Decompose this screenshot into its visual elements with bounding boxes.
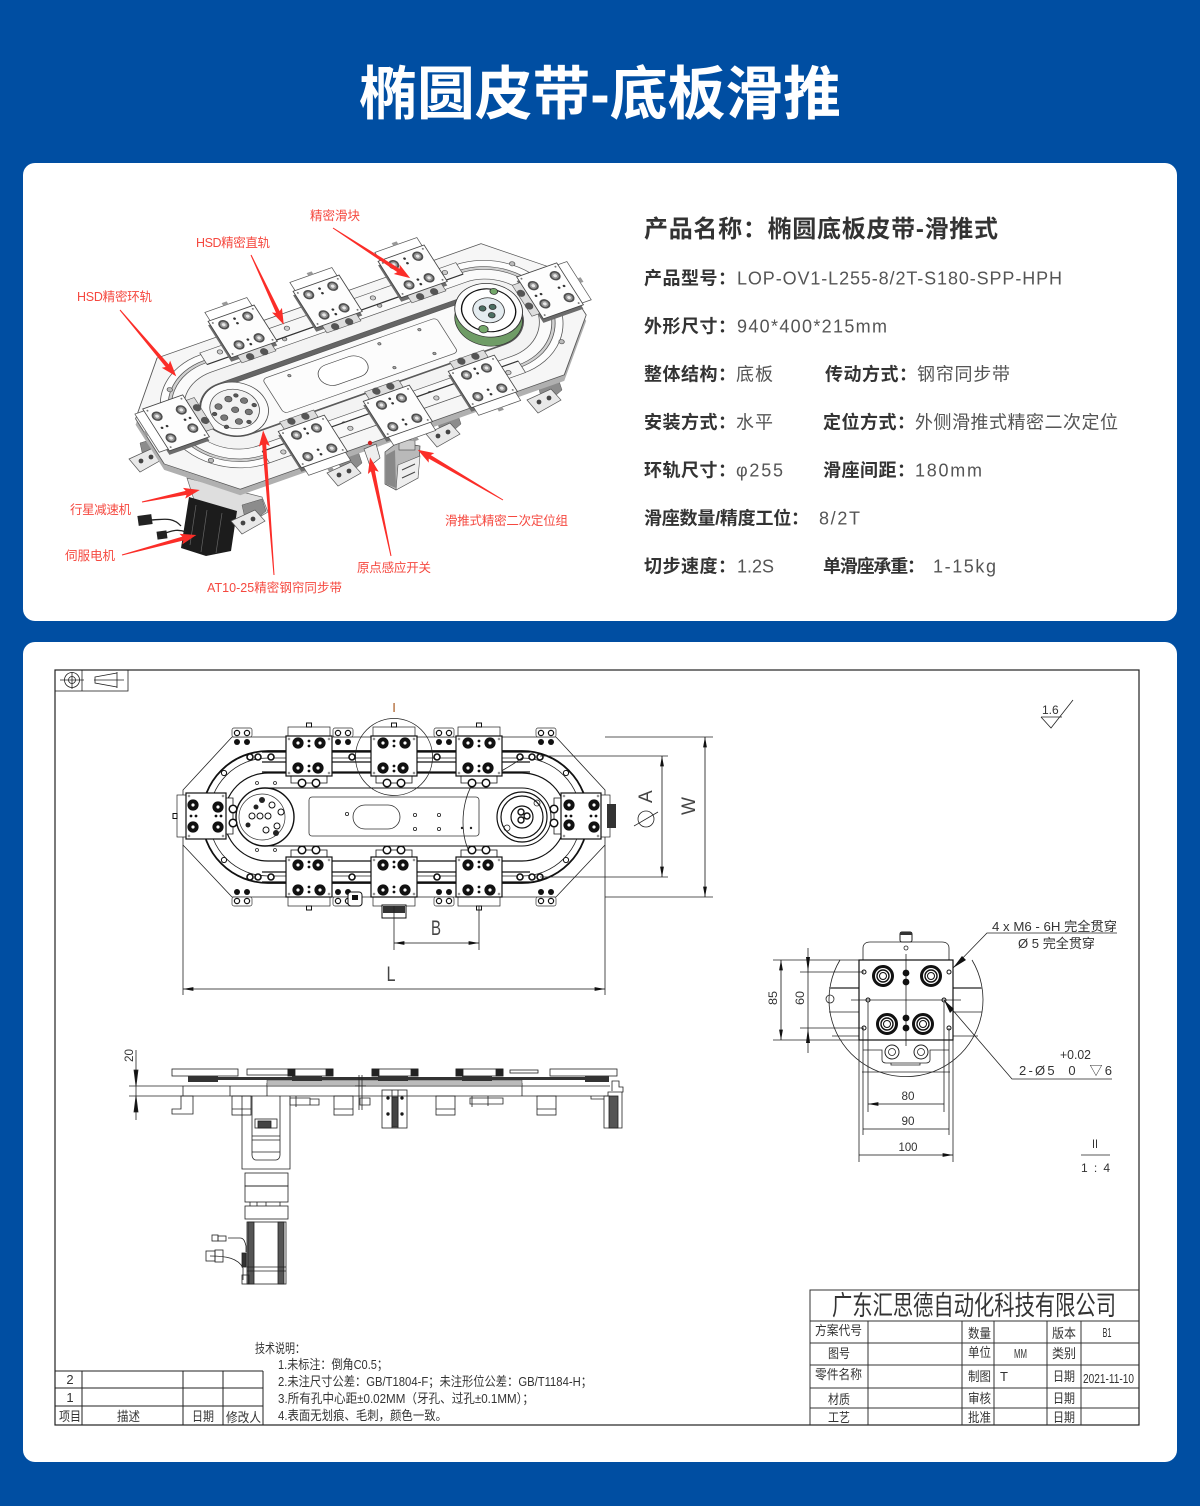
side view drawing: [122, 1049, 623, 1284]
spec: dimensions: 外形尺寸：: [644, 316, 736, 336]
side sensors: [290, 1075, 503, 1110]
detail view II: [766, 919, 1117, 1175]
technical notes: 4.表面无划痕、毛刺，颜色一致。: [278, 1408, 447, 1423]
dimension 80, 90, 100: 100: [898, 1140, 918, 1154]
technical notes: 技术说明：: [255, 1341, 305, 1356]
side gearbox and motor: [242, 1096, 290, 1284]
company title block: T: [1000, 1369, 1008, 1384]
dimension ΦA: A: [636, 790, 657, 803]
spec: mounting and positioning: 安装方式：: [644, 412, 736, 432]
callout: threaded holes: 4 x M6 - 6H 完全贯穿: [992, 919, 1117, 934]
revision table: 日期: [192, 1409, 214, 1424]
spec: structure and drive: 钢帘同步带: [917, 364, 1010, 384]
feet: [232, 728, 556, 906]
plan view drawing: [173, 723, 616, 918]
left wheel: [189, 374, 280, 444]
company title block: 广东汇思德自动化科技有限公司: [832, 1291, 1116, 1321]
spec: slider count: 滑座数量/精度工位：: [644, 508, 809, 528]
company title block: 版本: [1052, 1326, 1076, 1341]
spec: mounting and positioning: 定位方式：: [823, 412, 915, 432]
company title block: 单位: [968, 1345, 991, 1360]
callout: threaded holes: Ø 5 完全贯穿: [1018, 936, 1095, 951]
dimension B: B: [431, 917, 441, 940]
title: 椭圆皮带-底板滑推: [359, 62, 841, 127]
technical notes: 3.所有孔中心距±0.02MM（牙孔、过孔±0.1MM）；: [278, 1391, 534, 1407]
panel: product overview: [23, 163, 1177, 621]
base plate: [108, 232, 613, 513]
callout: pin holes: [944, 1000, 1112, 1079]
dimension 80, 90, 100: 80: [902, 1089, 915, 1103]
3D product illustration: [90, 195, 635, 556]
rail ring and centre plate: [134, 242, 589, 486]
straight guides: [200, 263, 525, 463]
spec: structure and drive: 传动方式：: [825, 364, 917, 384]
company title block: 日期: [1053, 1391, 1075, 1406]
label: origin switch: 原点感应开关: [357, 560, 431, 575]
secondary positioning group: [385, 440, 420, 490]
spec: speed and load: [644, 556, 996, 576]
spec heading: 产品名称：椭圆底板皮带-滑推式: [644, 216, 998, 243]
product spec list: [644, 216, 1118, 576]
spec: dimensions: [644, 316, 887, 336]
projection symbol: [55, 670, 128, 691]
positioning block and sensors: [348, 804, 616, 918]
company title block: [810, 1290, 1139, 1425]
dimension L: L: [386, 963, 396, 986]
spec: structure and drive: 底板: [736, 364, 773, 384]
label: secondary positioning: 滑推式精密二次定位组: [445, 513, 568, 528]
company title block: 制图: [968, 1369, 991, 1384]
arrow: straight rail: [246, 253, 289, 327]
revision table: 1: [66, 1390, 74, 1405]
spec: ring size and pitch: φ255: [736, 460, 783, 480]
spec: model: LOP-OV1-L255-8/2T-S180-SPP-HPH: [737, 268, 1062, 288]
company title block: 工艺: [828, 1410, 850, 1425]
label: HSD ring rail: HSD精密环轨: [77, 289, 152, 304]
revision table: 修改人: [226, 1410, 261, 1425]
dimension 85 and 60: 85: [766, 991, 780, 1005]
dimension W: W: [679, 797, 700, 815]
company title block: 审核: [968, 1391, 991, 1406]
spec: speed and load: 1-15kg: [933, 556, 996, 576]
mounting feet: [129, 378, 562, 534]
slider shadows: [109, 214, 616, 507]
dimension 85 and 60: 60: [793, 991, 807, 1005]
dimension 20: [122, 1049, 172, 1120]
dimension W: [605, 737, 713, 897]
spec: speed and load: 切步速度：: [644, 556, 736, 576]
scale note: [1081, 1137, 1110, 1175]
spec: speed and load: 单滑座承重：: [823, 556, 925, 576]
dimension L: [183, 845, 605, 995]
revision table: [55, 1371, 263, 1425]
dimension ΦA: [540, 756, 668, 877]
label: planetary reducer: 行星减速机: [70, 503, 131, 517]
company title block: 数量: [968, 1326, 991, 1341]
drawing frame: [55, 670, 1139, 1425]
dimension 85 and 60: [766, 948, 864, 1053]
spec: ring size and pitch: 滑座间距：: [823, 460, 915, 480]
company title block: 批准: [968, 1410, 991, 1425]
callout: pin holes: 2-Ø5 0 ▽6: [1019, 1063, 1112, 1078]
spec: mounting and positioning: 水平: [736, 412, 773, 432]
spec: slider count: 8/2T: [819, 508, 860, 528]
arrow: planetary reducer: [141, 485, 201, 507]
arrow: ring rail: [116, 306, 180, 380]
spec: mounting and positioning: [644, 412, 1118, 432]
label: timing belt: AT10-25精密钢帘同步带: [207, 580, 342, 595]
revision table: 描述: [117, 1409, 140, 1424]
detail circle I: [356, 700, 432, 796]
spec: ring size and pitch: [644, 460, 982, 480]
side slider row: [172, 1069, 617, 1086]
detail bolts: [862, 966, 951, 1034]
right wheel: [443, 275, 534, 354]
spec: speed and load: 1.2S: [737, 556, 774, 576]
motor and gearbox: [137, 478, 268, 556]
rail bolts: [221, 754, 569, 880]
revision table: 项目: [59, 1409, 81, 1424]
spec: mounting and positioning: 外侧滑推式精密二次定位: [915, 412, 1118, 432]
spec: structure and drive: 整体结构：: [644, 364, 736, 384]
sensor switch: [364, 441, 380, 466]
spec: ring size and pitch: 180mm: [915, 460, 982, 480]
roughness symbol: [1041, 700, 1073, 728]
panel: engineering drawing: [23, 642, 1177, 1462]
arrow: secondary positioning: [415, 445, 506, 505]
arrow: origin switch: [365, 456, 396, 557]
callouts: [116, 223, 506, 575]
technical notes: 1.未标注：倒角C0.5；: [278, 1357, 388, 1373]
dimension 80, 90, 100: [859, 1002, 953, 1162]
spec: dimensions: 940*400*215mm: [737, 316, 887, 336]
side cables: [206, 1235, 249, 1284]
left wheel drawing: [236, 788, 294, 846]
scale note: 1 : 4: [1081, 1161, 1110, 1175]
technical notes: 2.未注尺寸公差：GB/T1804-F；未注形位公差：GB/T1184-H；: [278, 1374, 592, 1390]
sliders: [90, 195, 635, 518]
label: servo motor: 伺服电机: [65, 549, 115, 563]
spec: ring size and pitch: 环轨尺寸：: [644, 460, 736, 480]
arrow: timing belt: [258, 430, 279, 575]
scale note: II: [1092, 1137, 1098, 1151]
company title block: 日期: [1053, 1369, 1075, 1384]
company title block: 零件名称: [815, 1367, 862, 1382]
side right bracket: [591, 1081, 623, 1128]
company title block: B1: [1102, 1325, 1112, 1340]
right wheel drawing: [497, 792, 547, 842]
dimension B: [394, 906, 479, 950]
company title block: 图号: [828, 1346, 850, 1361]
arrow: precision slider: [330, 223, 413, 283]
company title block: MM: [1014, 1346, 1027, 1361]
company title block: 类别: [1052, 1346, 1076, 1361]
detail circle I: I: [392, 700, 396, 715]
roughness symbol: 1.6: [1042, 703, 1059, 717]
side positioning cylinder: [382, 1090, 407, 1128]
company title block: 2021-11-10: [1083, 1371, 1134, 1386]
company title block: 材质: [828, 1392, 850, 1407]
label: HSD straight rail: HSD精密直轨: [196, 235, 270, 250]
label: precision slider: 精密滑块: [310, 208, 360, 223]
spec: structure and drive: [644, 364, 1010, 384]
dimension 20: 20: [122, 1049, 136, 1062]
plan sliders: [173, 723, 614, 910]
spec: model: 产品型号：: [644, 268, 736, 288]
technical notes: [255, 1341, 592, 1423]
arrow: servo motor: [121, 530, 198, 560]
company title block: 日期: [1053, 1410, 1075, 1425]
revision table: 2: [66, 1372, 74, 1387]
side feet: [172, 1096, 556, 1115]
dimension 80, 90, 100: 90: [902, 1114, 915, 1128]
company title block: 方案代号: [815, 1323, 862, 1338]
callout: threaded holes: [953, 919, 1117, 968]
callout: pin holes: +0.02: [1060, 1047, 1091, 1062]
